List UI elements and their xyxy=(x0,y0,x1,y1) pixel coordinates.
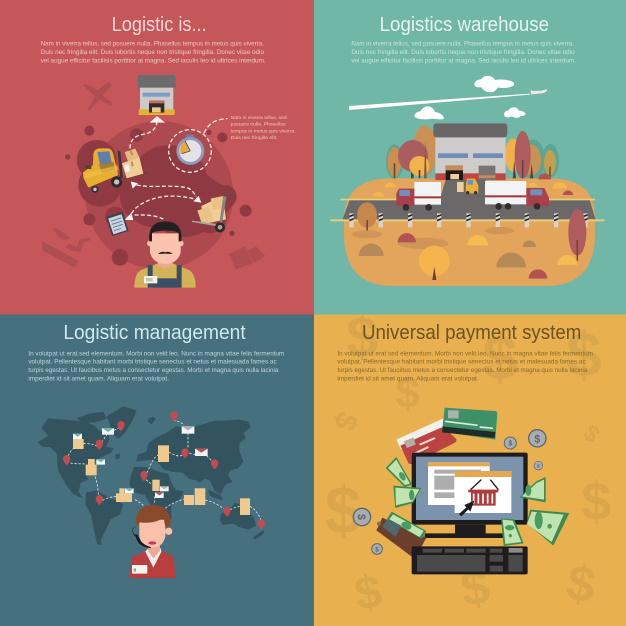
icon: envelopes xyxy=(73,426,208,498)
icon: coins xyxy=(353,430,546,554)
icon: background dollar signs xyxy=(325,306,611,620)
arrow: stopwatch callout leader xyxy=(204,119,227,133)
icon: coins: $ xyxy=(534,433,540,445)
text block: warehouse intro: vel augue efficitur facilisis porttitor at magna. Sed iaculis leo id ultrices interdum. xyxy=(351,57,576,64)
icon: background dollar signs: $ xyxy=(327,408,364,435)
text block: payment intro: imperdiet id sit amet quam. Aliquam erat volutpat. xyxy=(337,376,479,383)
icon: right delivery truck xyxy=(485,181,549,210)
text block: payment intro xyxy=(337,350,593,383)
icon: ship silhouette xyxy=(42,228,91,267)
icon: background dollar signs: $ xyxy=(325,474,362,548)
icon: stopwatch xyxy=(169,130,211,172)
icon: ground shrubs xyxy=(352,173,577,279)
icon: credit cards xyxy=(396,408,497,464)
text block: callout note: Duis nec fringilla elit. xyxy=(231,135,277,141)
icon: background trees xyxy=(386,125,559,181)
icon: parcels xyxy=(73,439,250,515)
icon: foreground tree right xyxy=(568,209,586,261)
panel: logistic is xyxy=(0,0,314,314)
icon: plane silhouette xyxy=(83,82,113,111)
icon: background dollar signs: $ xyxy=(562,554,600,614)
heading: logistics warehouse: Logistics warehouse xyxy=(380,14,549,36)
icon: coins: $ xyxy=(508,439,512,448)
icon: truck silhouette xyxy=(229,247,265,269)
icon: ground island xyxy=(344,178,595,286)
icon: left delivery truck xyxy=(396,182,441,211)
icon: cash banknotes xyxy=(386,457,569,546)
icon: forklift xyxy=(83,148,148,193)
text block: logistic intro xyxy=(41,40,266,64)
text block: payment intro: In volutpat ut erat sed elementum. Morbi non velit leo. Nunc in magna vitae felis fermentum xyxy=(337,350,593,357)
icon: coins: $ xyxy=(537,464,540,470)
icon: background dollar signs: $ xyxy=(482,324,518,394)
text block: management intro: turpis egestas. Ut faucibus metus a consectetur egestas. Morbi et magna quis nulla lacinia xyxy=(28,367,279,374)
icon: roadside bollards xyxy=(349,213,588,227)
icon: map pins xyxy=(63,411,265,530)
icon: background dollar signs: $ xyxy=(351,564,385,620)
icon: warehouse building xyxy=(433,123,507,180)
text block: management intro xyxy=(28,350,285,383)
arrow: forklift to warehouse xyxy=(130,116,165,148)
heading: universal payment system: Universal payment system xyxy=(362,322,581,344)
text block: management intro: In volutpat ut erat sed elementum. Morbi non velit leo. Nunc in magna vitae felis fermentum xyxy=(28,350,285,357)
icon: warehouse xyxy=(138,75,176,115)
icon: worker avatar xyxy=(134,221,196,288)
text block: callout note: Nam in viverra tellus, sed xyxy=(231,115,287,121)
icon: background dollar signs: $ xyxy=(396,370,420,418)
arrow: trolley to clipboard xyxy=(125,196,193,220)
icon: round foreground tree xyxy=(419,246,450,280)
text block: payment intro: volutpat. Pellentesque habitant morbi tristique senectus et netus et malesuada fames ac xyxy=(337,359,586,366)
icon: background dollar signs: $ xyxy=(578,419,605,448)
panel: logistic management xyxy=(0,314,314,626)
chart: dashed routes xyxy=(67,420,261,521)
icon: clipboard xyxy=(106,212,129,236)
icon: wallet xyxy=(376,512,426,559)
text block: payment intro: turpis egestas. Ut faucibus metus a consectetur egestas. Morbi et magna quis nulla lacinia xyxy=(337,367,588,374)
icon: background dollar signs: $ xyxy=(346,306,378,369)
text block: warehouse intro xyxy=(351,40,576,64)
icon: hand trolley with boxes xyxy=(192,195,234,232)
icon: background dollar signs: $ xyxy=(457,558,494,618)
icon: background dollar signs: $ xyxy=(566,320,602,390)
icon: keyboard xyxy=(412,546,528,574)
text block: callout note: posuere nulla. Phasellus xyxy=(231,122,286,128)
icon: coins: $ xyxy=(355,514,367,520)
chart: globe backdrop xyxy=(65,121,252,269)
text block: warehouse intro: Duis nec fringilla elit. Duis lobortis neque non tristique fringilla. Donec vitae odio xyxy=(351,49,575,56)
panel: universal payment system xyxy=(314,306,626,626)
icon: plane with contrail xyxy=(349,89,547,110)
heading: logistic management: Logistic management xyxy=(63,322,246,344)
icon: background dollar signs: $ xyxy=(581,473,611,532)
text block: management intro: imperdiet id sit amet quam. Aliquam erat volutpat. xyxy=(28,376,169,383)
text block: callout note: tempus in metus quis viverra. xyxy=(231,128,296,134)
icon: road xyxy=(330,180,604,221)
text block: logistic intro: Duis nec fringilla elit. Duis lobortis neque non tristique fringilla. Donec vitae odio xyxy=(41,49,264,56)
icon: operator avatar xyxy=(129,505,176,578)
heading: logistic is: Logistic is... xyxy=(112,14,207,36)
icon: yellow forklift xyxy=(457,179,478,194)
text block: logistic intro: Nam in viverra tellus, sed posuere nulla. Phasellus tempus in metus quis viverra. xyxy=(41,40,264,47)
chart: world map xyxy=(37,406,265,545)
text block: logistic intro: vel augue efficitur facilisis porttitor at magna. Sed iaculis leo id ultrices interdum. xyxy=(41,57,266,64)
icon: coins: $ xyxy=(375,546,379,553)
arrow: forklift to trolley xyxy=(131,181,201,203)
text block: callout note xyxy=(231,115,296,141)
panel: logistics warehouse xyxy=(314,0,626,314)
text block: management intro: volutpat. Pellentesque habitant morbi tristique senectus et netus et malesuada fames ac xyxy=(28,359,277,366)
text block: warehouse intro: Nam in viverra tellus, sed posuere nulla. Phasellus tempus in metus quis viverra. xyxy=(351,40,574,47)
icon: foreground tree left xyxy=(357,202,377,232)
icon: computer monitor xyxy=(412,453,528,538)
icon: clouds xyxy=(414,76,525,119)
